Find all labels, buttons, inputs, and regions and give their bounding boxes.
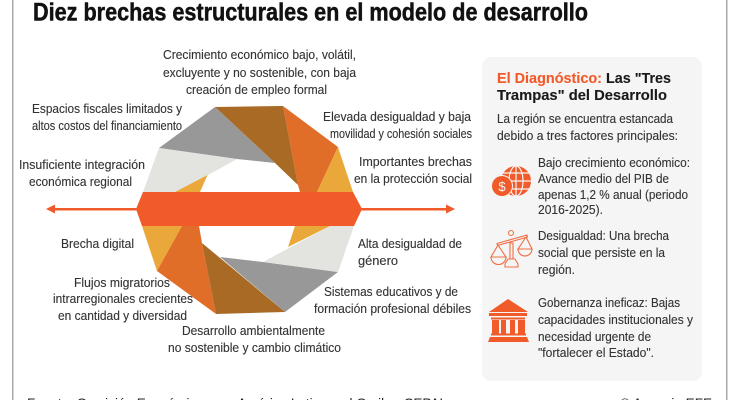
panel heading (497, 70, 671, 104)
label: crecimiento (163, 48, 356, 97)
icon: globe with dollar (491, 166, 531, 197)
label: crecimiento: Crecimiento económico bajo, volátil, (163, 48, 356, 62)
panel intro: debido a tres factores principales: (497, 129, 678, 143)
text: gobernanza: capacidades institucionales y (538, 313, 694, 327)
panel heading: Las "Tres (606, 70, 671, 87)
label: desigualdad (323, 110, 472, 141)
text: desigualdad: Desigualdad: Una brecha (538, 229, 669, 243)
text: bajo crecimiento: Bajo crecimiento económico: (538, 156, 690, 170)
label: sistemas educativos: Sistemas educativos y de (324, 285, 458, 299)
label: crecimiento: excluyente y no sostenible, con baja (163, 66, 356, 80)
text: bajo crecimiento (538, 156, 690, 217)
text: bajo crecimiento: Avance medio del PIB de (538, 172, 669, 186)
label: flujos migratorios: intrarregionales crecientes (53, 292, 193, 306)
label: integración: económica regional (29, 175, 132, 189)
panel intro (497, 112, 678, 143)
label: sistemas educativos (314, 285, 471, 316)
label: protección social: en la protección social (354, 172, 472, 186)
label: género (358, 237, 462, 268)
text: gobernanza: necesidad urgente de (538, 330, 651, 344)
label: flujos migratorios: en cantidad y diversidad (58, 309, 187, 323)
label: protección social: Importantes brechas (359, 155, 472, 169)
text: bajo crecimiento: 2016-2025). (538, 203, 603, 217)
label: brecha digital: Brecha digital (61, 237, 134, 251)
panel heading: El Diagnóstico: (497, 70, 602, 87)
label: flujos migratorios (53, 276, 193, 323)
text: bajo crecimiento: apenas 1,2 % anual (periodo (538, 188, 688, 202)
text: desigualdad: social que persiste en la (538, 246, 665, 260)
arrow: horizontal axis (46, 204, 455, 214)
label: espacios fiscales: Espacios fiscales limitados y (32, 102, 183, 116)
panel intro: La región se encuentra estancada (497, 112, 673, 126)
diagram: ten-gap ring (46, 106, 455, 314)
label: desarrollo ambiental: no sostenible y cambio climático (168, 341, 341, 355)
icon: institution building (488, 299, 529, 342)
text: desigualdad: región. (538, 263, 575, 277)
text: gobernanza (538, 296, 694, 360)
label: género: Alta desigualdad de (358, 237, 462, 251)
label: flujos migratorios: Flujos migratorios (74, 276, 170, 290)
label: crecimiento: creación de empleo formal (186, 83, 327, 97)
panel heading: Trampas" del Desarrollo (497, 87, 667, 104)
text: gobernanza: "fortalecer el Estado". (538, 346, 654, 360)
central bar (136, 192, 362, 226)
label: desigualdad: Elevada desigualdad y baja (323, 110, 471, 124)
label: espacios fiscales: altos costos del financiamiento (32, 119, 182, 133)
label: género: género (358, 254, 398, 268)
icon: scales (491, 230, 532, 267)
label: desarrollo ambiental: Desarrollo ambientalmente (182, 324, 325, 338)
text: gobernanza: Gobernanza ineficaz: Bajas (538, 296, 680, 310)
label: integración: Insuficiente integración (19, 158, 145, 172)
label: espacios fiscales (32, 102, 183, 133)
text: desigualdad (538, 229, 669, 277)
label: desigualdad: movilidad y cohesión sociales (330, 127, 472, 141)
panel: El Diagnóstico (482, 57, 702, 381)
label: sistemas educativos: formación profesional débiles (314, 302, 471, 316)
label: desarrollo ambiental (168, 324, 341, 355)
ring segments (142, 106, 354, 314)
icon: globe with dollar: $ (498, 179, 506, 194)
label: integración (19, 158, 145, 189)
label: protección social (354, 155, 472, 186)
